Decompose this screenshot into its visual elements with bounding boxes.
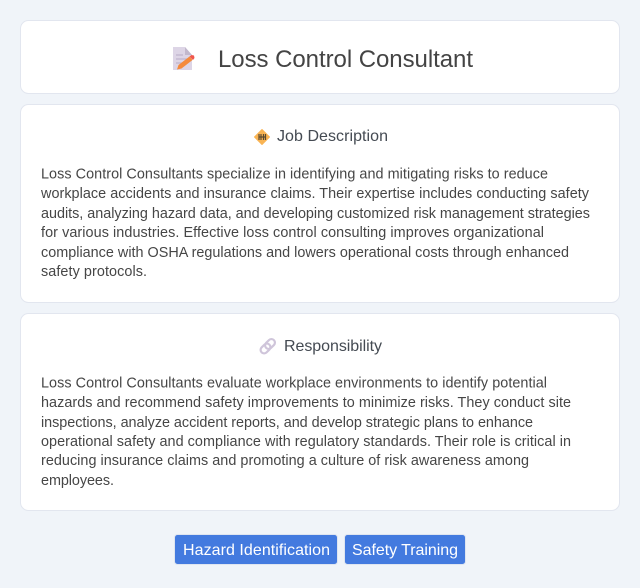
tag: safety training: Safety Training	[352, 542, 458, 559]
text block: job description: audits, analyzing hazard data, and developing customized risk management strategies	[41, 206, 590, 222]
heading: job description: Job Description	[277, 128, 388, 145]
text block: job description: Loss Control Consultants specialize in identifying and mitigating risks to reduce	[41, 166, 548, 182]
title: Loss Control Consultant	[218, 46, 473, 73]
tag: hazard identification: Hazard Identification	[183, 542, 330, 559]
panel: job description	[20, 104, 620, 302]
text block: responsibility: operational safety and compliance with regulatory standards. Their role is critical in	[41, 434, 571, 450]
icon: diamond warning sign	[254, 130, 270, 144]
icon: chain link	[259, 338, 276, 355]
text block: job description: for various industries. Effective loss control consulting improves organizational	[41, 225, 544, 241]
text block: responsibility: hazards and recommend safety improvements to minimize risks. They conduct site	[41, 395, 571, 411]
text block: job description	[40, 166, 590, 280]
tag: hazard identification	[174, 534, 338, 564]
text block: job description: compliance with OSHA regulations and lowers operational costs through enhanced	[41, 245, 569, 261]
text block: job description: workplace accidents and insurance claims. Their expertise includes conducting safety	[40, 186, 590, 202]
heading: responsibility: Responsibility	[284, 338, 382, 355]
text block: responsibility: employees.	[41, 473, 114, 489]
text block: responsibility: reducing insurance claims and promoting a culture of risk awareness among	[41, 453, 529, 469]
panel: header	[20, 20, 620, 94]
panel: responsibility	[20, 314, 620, 510]
tag: safety training	[344, 534, 466, 564]
text block: responsibility	[41, 376, 571, 489]
text block: responsibility: inspections, analyze accident reports, and develop strategic plans to enhance	[41, 415, 533, 431]
text block: job description: safety protocols.	[41, 264, 147, 280]
icon: document with pencil	[173, 47, 194, 70]
text block: responsibility: Loss Control Consultants evaluate workplace environments to identify potential	[41, 376, 547, 392]
